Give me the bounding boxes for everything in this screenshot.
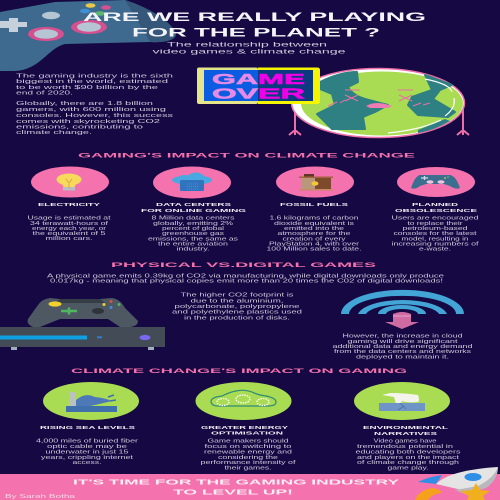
panel: fossil fuels: creation of every: [282, 236, 346, 242]
panel: environmental narratives: game play.: [388, 466, 428, 472]
panel: energy optimisation: focus on switching to: [204, 444, 292, 450]
panel: fossil fuels: [266, 166, 362, 252]
illustration: game over sign: [197, 68, 320, 104]
panel: planned obsolescence: petroleum-based: [402, 226, 468, 232]
title: ARE WE REALLY PLAYING: [83, 12, 426, 24]
icon: cloud server: [172, 172, 212, 191]
icon: cloud gears: [211, 390, 276, 406]
text block: intro: emissions, contributing to: [16, 124, 143, 130]
panel: environmental narratives: educating both developers: [356, 450, 461, 456]
footer call to action: TO LEVEL UP!: [173, 488, 293, 496]
panel: data centers: 8 Million data centers: [152, 216, 235, 222]
panel: fossil fuels: PlayStation 4, with over: [269, 242, 360, 248]
footer call to action: IT'S TIME FOR THE GAMING INDUSTRY: [73, 478, 399, 487]
panel: data centers: DATA CENTERS: [156, 202, 231, 207]
text block: cloud gaming: However, the increase in cloud: [342, 333, 463, 339]
text block: intro: The gaming industry is the sixth: [16, 74, 173, 80]
subtitle: video games & climate change: [152, 48, 347, 56]
text block: cloud gaming: [332, 333, 473, 360]
panel: environmental narratives: and players on the impact: [357, 455, 460, 461]
panel: environmental narratives: ENVIRONMENTAL: [363, 425, 448, 430]
text block: intro: end of 2020.: [16, 90, 74, 96]
icon: flooded city: [66, 392, 117, 412]
text block: physical vs digital summary: 0.017kg - meaning that physical copies emit more than 20 times the C02 of digital downloads!: [50, 278, 443, 284]
text block: intro: [16, 74, 173, 136]
icon: oil barrel: [299, 174, 333, 190]
panel: electricity: million cars.: [46, 236, 92, 242]
panel: environmental narratives: of climate change through: [357, 460, 459, 466]
subtitle: The relationship between: [167, 42, 328, 48]
icon: controller: [411, 175, 460, 189]
text block: intro: to be worth $90 billion by the: [16, 85, 158, 91]
panel: rising sea levels: 4,000 miles of buried fiber: [36, 438, 139, 444]
text block: CO2 footprint: due to the aluminium,: [190, 298, 284, 304]
text block: cloud gaming: deployed to maintain it.: [356, 354, 449, 360]
panel: fossil fuels: atmosphere for the: [278, 231, 351, 237]
heading: physical vs digital: PHYSICAL VS.DIGITAL GAMES: [111, 262, 377, 269]
text block: physical vs digital summary: A physical game emits 0.39kg of CO2 via manufacturing, while digital downloads only produce: [47, 273, 444, 279]
text block: physical vs digital summary: [47, 273, 444, 284]
text block: intro: gamers, with 600 million using: [16, 107, 166, 113]
panel: energy optimisation: renewable energy and: [204, 450, 292, 456]
panel: data centers: FOR ONLINE GAMING: [141, 208, 247, 213]
text block: cloud gaming: from the data centers and networks: [334, 349, 472, 355]
icon: light bulb: [56, 174, 82, 190]
panel: environmental narratives: Video games have: [374, 438, 437, 444]
illustration: game over sign: ER: [258, 86, 305, 102]
panel: fossil fuels: FOSSIL FUELS: [280, 202, 348, 207]
panel: footer banner: [0, 467, 500, 500]
panel: data centers: greenhouse gas: [162, 231, 225, 237]
panel: rising sea levels: years, crippling internet: [41, 455, 134, 461]
panel: planned obsolescence: to replace their: [408, 221, 463, 227]
panel: fossil fuels: emitted into the: [284, 226, 344, 232]
panel: rising sea levels: optic cable may be: [47, 444, 127, 450]
panel: energy optimisation: OPTIMISATION: [211, 430, 284, 436]
panel: planned obsolescence: model, resulting in: [402, 236, 469, 242]
text block: intro: climate change.: [16, 130, 93, 136]
panel: planned obsolescence: increasing numbers of: [392, 242, 479, 248]
panel: electricity: ELECTRICITY: [38, 202, 102, 207]
text block: cloud gaming: additional data and energy demand: [332, 344, 473, 350]
panel: planned obsolescence: [392, 167, 479, 252]
panel: data centers: [141, 166, 247, 252]
panel: environmental narratives: tremendous potential in: [357, 444, 453, 450]
text block: CO2 footprint: The higher CO2 footprint is: [180, 293, 294, 299]
panel: data centers: emissions, the same as: [148, 236, 239, 242]
title: [83, 12, 426, 40]
illustration: game over sign: OV: [212, 86, 258, 102]
panel: planned obsolescence: OBSOLESCENCE: [395, 208, 477, 213]
panel: data centers: percent of global: [162, 226, 224, 232]
icon: wifi download: [341, 290, 464, 329]
text block: CO2 footprint: in the production of disks.: [184, 315, 290, 321]
icon: top game controller: [0, 0, 176, 71]
panel: rising sea levels: underwater in just 15: [46, 450, 129, 456]
panel: fossil fuels: 100 Million sales to date.: [266, 246, 362, 252]
panel: electricity: Usage is estimated at: [28, 216, 111, 222]
heading: climate change's impact: CLIMATE CHANGE'S IMPACT ON GAMING: [71, 368, 407, 375]
panel: electricity: the equivalent of 5: [32, 231, 106, 237]
panel: energy optimisation: their games.: [224, 466, 272, 472]
panel: rising sea levels: RISING SEA LEVELS: [40, 425, 135, 430]
text block: intro: Globally, there are 1.8 billion: [16, 101, 153, 107]
panel: planned obsolescence: PLANNED: [412, 202, 459, 207]
illustration: game over sign: GA: [212, 71, 258, 88]
panel: data centers: globally, emitting 2%: [153, 221, 234, 227]
panel: environmental narratives: NARRATIVES: [374, 431, 437, 436]
panel: planned obsolescence: consoles for the latest: [394, 231, 477, 237]
panel: energy optimisation: considering the: [218, 455, 278, 461]
text block: intro: biggest in the world, estimated: [16, 79, 168, 85]
panel: planned obsolescence: Users are encouraged: [392, 216, 479, 222]
panel: data centers: the entire aviation: [158, 242, 228, 248]
panel: data centers: industry.: [176, 246, 210, 252]
icon: rocket and star: [415, 467, 498, 500]
text block: intro: comes with skyrocketing CO2: [16, 119, 160, 125]
panel: environmental narratives: [354, 382, 461, 472]
subtitle: [152, 42, 347, 56]
panel: electricity: 34 terawatt-hours of: [30, 221, 109, 227]
icon: polar bear on ice: [379, 393, 425, 411]
panel: energy optimisation: [196, 382, 296, 472]
footer call to action: [73, 478, 399, 496]
author credit: By Sarah Botha: [5, 494, 75, 500]
panel: planned obsolescence: e-waste.: [419, 246, 451, 252]
panel: rising sea levels: [36, 382, 139, 466]
heading: gaming's impact: GAMING'S IMPACT ON CLIMATE CHANGE: [78, 152, 416, 159]
panel: energy optimisation: GREATER ENERGY: [201, 425, 290, 430]
panel: energy optimisation: performance intensity of: [200, 460, 296, 466]
text block: CO2 footprint: [172, 293, 302, 321]
panel: fossil fuels: dioxide equivalent is: [274, 221, 355, 227]
panel: fossil fuels: 1.6 kilograms of carbon: [270, 216, 359, 222]
text block: cloud gaming: gaming will drive significant: [348, 339, 459, 345]
panel: rising sea levels: access.: [72, 460, 102, 466]
panel: energy optimisation: Game makers should: [208, 438, 289, 444]
illustration: game over sign: ME: [258, 71, 305, 88]
illustration: console and controller: [0, 298, 165, 350]
text block: CO2 footprint: polycarbonate, polypropylene: [174, 304, 300, 310]
panel: electricity: [28, 166, 111, 242]
text block: intro: consoles. However, this success: [16, 113, 173, 119]
text block: CO2 footprint: and polyethylene plastics used: [172, 310, 302, 316]
title: FOR THE PLANET ?: [132, 28, 380, 40]
panel: electricity: energy each year, or: [32, 226, 106, 232]
illustration: sad earth: [289, 68, 469, 138]
